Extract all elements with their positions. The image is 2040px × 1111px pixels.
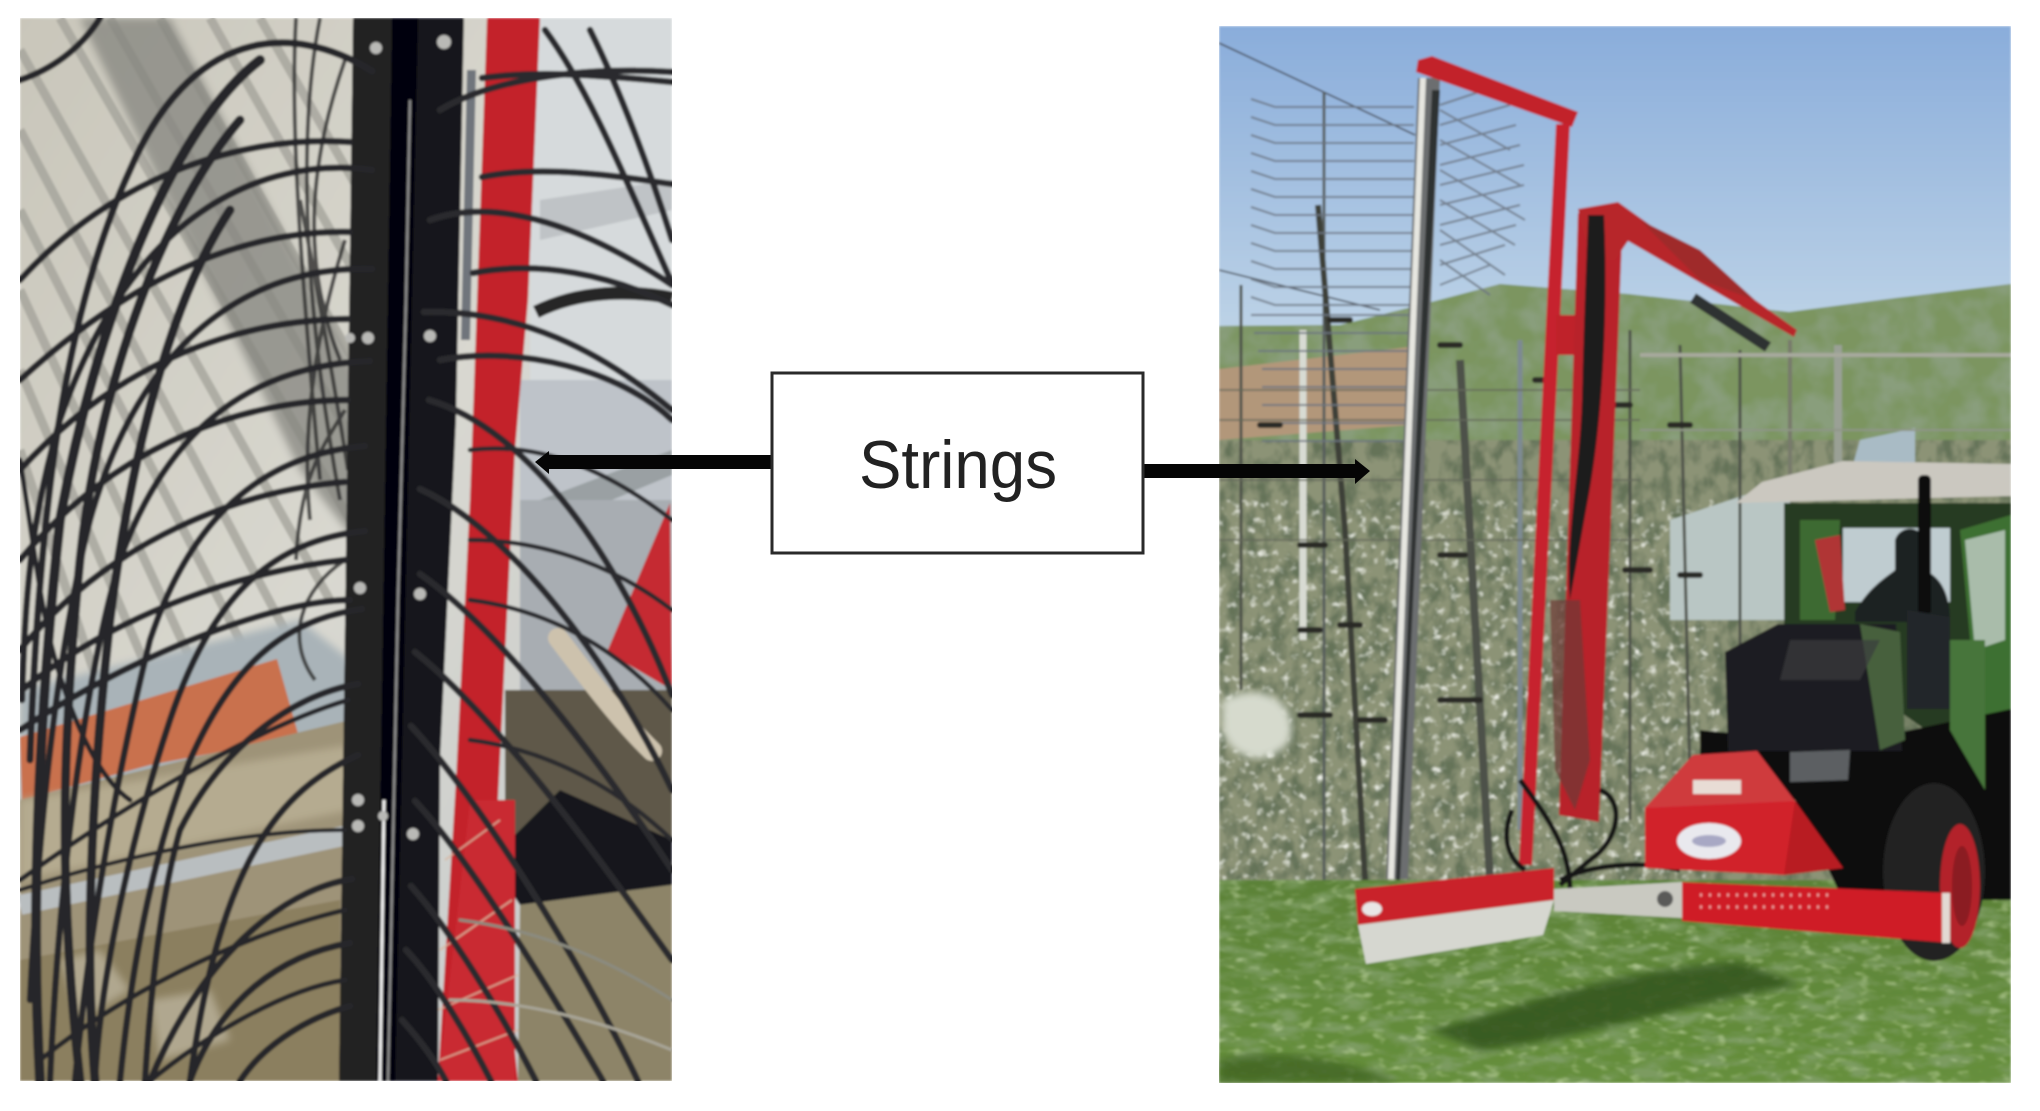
- cab and green body: [1736, 461, 2011, 503]
- hoses: [1507, 780, 1680, 890]
- photo: tractor with red string thinner in orchard: [1219, 26, 2011, 1083]
- red column and arm: [1556, 314, 1576, 356]
- driver: [1855, 529, 1950, 622]
- arrow: from label to strings on machine: [1143, 459, 1370, 484]
- greenhouse behind tractor: [1670, 480, 1790, 620]
- exhaust pipe: [1918, 475, 1931, 615]
- sky: [1219, 26, 2011, 326]
- mower head unit: [1355, 868, 1554, 925]
- tractor lower body: [1700, 709, 2011, 900]
- background posts and wires: [1219, 43, 2011, 880]
- red housing: [1645, 751, 1843, 875]
- grey connector: [1554, 882, 1682, 918]
- grass: [1219, 880, 2011, 1083]
- tyre: [1883, 783, 1985, 961]
- red top frame: [1416, 56, 1578, 127]
- hood: [1725, 624, 1902, 751]
- label box: Strings: Strings: [859, 427, 1057, 503]
- trellis clamps: [1260, 320, 1700, 720]
- arrow: from label to strings in close-up photo: [535, 451, 771, 474]
- beam: [1682, 882, 1950, 943]
- label box: Strings: [772, 373, 1143, 553]
- string net behind post: [1251, 85, 1525, 441]
- bare field: [1219, 347, 1409, 440]
- main grey post: [1386, 78, 1440, 879]
- hillside: [1219, 282, 2011, 442]
- orchard rows: [1219, 440, 2011, 900]
- photo: close-up of strings on the vertical post: [20, 18, 672, 1081]
- grille and lights: [1790, 750, 1850, 782]
